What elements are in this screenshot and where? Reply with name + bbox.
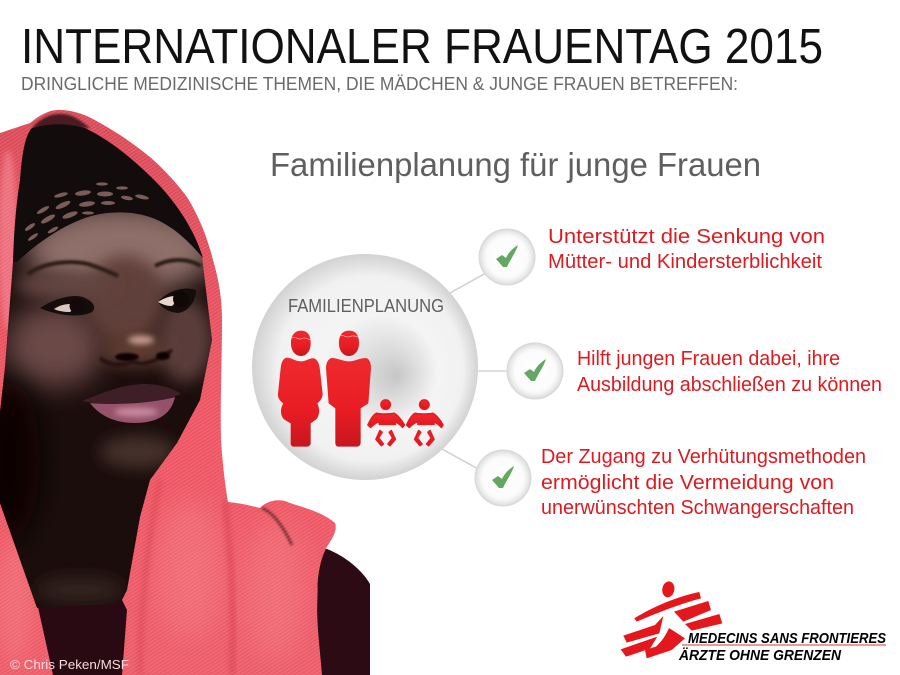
heading: Familienplanung für junge Frauen (270, 147, 761, 184)
photo: woman with red headscarf (0, 105, 370, 675)
title: INTERNATIONALER FRAUENTAG 2015 (21, 20, 823, 74)
label: FAMILIENPLANUNG (288, 296, 444, 316)
check badge 3 (474, 450, 532, 506)
text 1: Unterstützt die Senkung von (548, 226, 825, 248)
baby two (407, 400, 443, 446)
text 3: ermöglicht die Vermeidung von (541, 472, 834, 494)
net holes (24, 182, 149, 242)
text 3: Der Zugang zu Verhütungsmethoden (541, 446, 866, 468)
text 1: Mütter- und Kindersterblichkeit (548, 251, 822, 273)
text 3: unerwünschten Schwangerschaften (541, 497, 854, 519)
icon: check (496, 245, 518, 267)
text 1 (548, 226, 825, 273)
woman (291, 331, 311, 356)
scarf shading (0, 105, 340, 675)
head and neck (0, 130, 212, 608)
subtitle: DRINGLICHE MEDIZINISCHE THEMEN, DIE MÄDCHEN & JUNGE FRAUEN BETREFFEN: (21, 74, 738, 94)
logo text 2: ÄRZTE OHNE GRENZEN (678, 647, 842, 664)
left eye (40, 296, 94, 315)
right eye (158, 288, 196, 313)
connector lines (442, 273, 510, 470)
text 2: Hilft jungen Frauen dabei, ihre (577, 348, 840, 370)
text 3 (541, 446, 866, 519)
eyebrows (28, 260, 201, 276)
lips (82, 384, 181, 423)
hair lines (291, 335, 359, 340)
text 2: Ausbildung abschließen zu können (577, 374, 882, 396)
central circle: family planning (252, 254, 478, 480)
logo: MSF (621, 580, 886, 664)
logo figure (621, 580, 722, 658)
baby one (368, 400, 404, 446)
nose (100, 334, 172, 366)
top of hood shadow (32, 114, 90, 128)
icon: check (492, 466, 514, 488)
net cap (13, 124, 203, 262)
photo credit: © Chris Peken/MSF (10, 657, 129, 672)
sweater right (316, 548, 370, 675)
logo line (682, 644, 886, 646)
scarf (0, 110, 336, 675)
check badge 2 (506, 342, 564, 400)
icon: family (278, 331, 443, 447)
icon: check (524, 359, 546, 381)
man (339, 331, 359, 356)
check badge 1 (478, 228, 536, 286)
text 2 (577, 348, 882, 396)
sweater centre (38, 600, 127, 675)
